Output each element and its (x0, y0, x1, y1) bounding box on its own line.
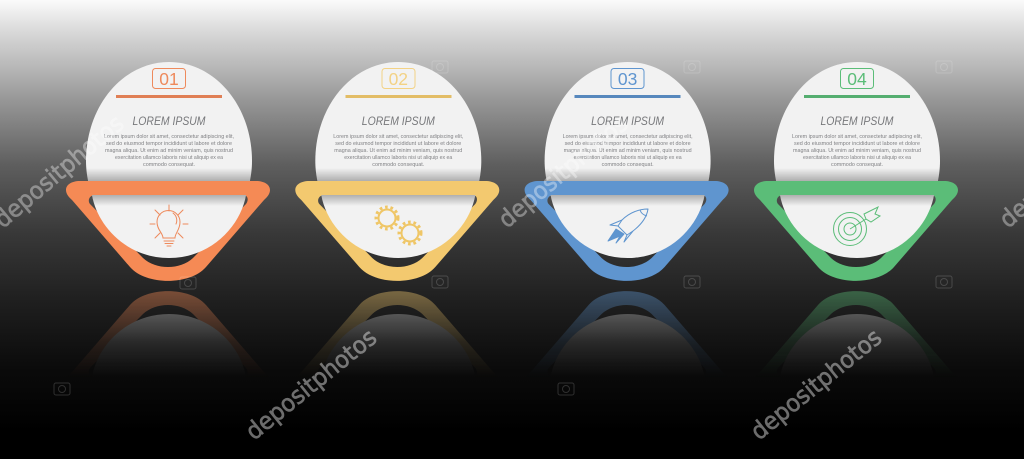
number badge 04: 04 (847, 69, 867, 89)
heading 01: LOREM IPSUM (132, 115, 206, 128)
body text 02: exercitation ullamco laboris nisi ut aliquip ex ea (344, 155, 453, 161)
body text 01 (104, 134, 234, 168)
triangular frame 03 (525, 181, 729, 281)
body text 01: sed do eiusmod tempor incididunt ut labore et dolore (106, 141, 232, 147)
accent bar 03 (574, 95, 680, 98)
icon: target with arrow (834, 207, 880, 246)
body text 02 (333, 134, 464, 168)
heading 02: LOREM IPSUM (362, 115, 435, 128)
watermarks: depositphotos (745, 323, 887, 446)
triangular frame 04 (754, 181, 958, 281)
body text 04: Lorem ipsum dolor sit amet, consectetur adipiscing elit, (792, 134, 922, 140)
watermarks: depositphotos (493, 109, 633, 234)
body text 04: commodo consequat. (831, 162, 883, 168)
number badge 02: 02 (389, 69, 408, 89)
icon: rocket (608, 209, 648, 243)
number badge 01: 01 (159, 69, 179, 89)
body text 04 (792, 134, 922, 168)
panel: card 01 (66, 62, 270, 281)
body text 03: magna aliqua. Ut enim ad minim veniam, quis nostrud (564, 148, 692, 154)
body text 02: commodo consequat. (372, 162, 425, 168)
body text 03 (563, 134, 693, 168)
body text 03: commodo consequat. (602, 162, 654, 168)
watermark camera icons (54, 61, 952, 395)
body text 04: sed do eiusmod tempor incididunt ut labore et dolore (794, 141, 920, 147)
number badge 02 (382, 68, 415, 89)
body text 01: exercitation ullamco laboris nisi ut aliquip ex ea (115, 155, 224, 161)
triangular frame 01 (66, 181, 270, 281)
body text 03: sed do eiusmod tempor incididunt ut labore et dolore (565, 141, 691, 147)
icon: gears (376, 207, 421, 244)
body text 03: Lorem ipsum dolor sit amet, consectetur adipiscing elit, (563, 134, 693, 140)
number badge 01 (152, 68, 186, 89)
watermarks (0, 109, 1024, 446)
number badge 03: 03 (618, 69, 637, 89)
heading 04: LOREM IPSUM (820, 115, 894, 128)
lower disc 01 (88, 195, 248, 258)
lower disc 02 (317, 195, 477, 258)
lower disc 03 (547, 195, 707, 258)
body text 02: magna aliqua. Ut enim ad minim veniam, quis nostrud (334, 148, 462, 154)
body text 02: Lorem ipsum dolor sit amet, consectetur adipiscing elit, (333, 134, 464, 140)
watermarks: depositphotos (240, 323, 382, 446)
number badge 03 (611, 68, 644, 89)
accent bar 01 (116, 95, 222, 98)
reflections of the four cards (79, 291, 942, 365)
icon: light bulb (150, 205, 188, 246)
body text 04: magna aliqua. Ut enim ad minim veniam, quis nostrud (793, 148, 921, 154)
triangular frame 02 (295, 181, 499, 281)
panel: card 03 (525, 62, 729, 281)
body text 03: exercitation ullamco laboris nisi ut aliquip ex ea (574, 155, 682, 161)
panel: card 04 (754, 62, 958, 281)
body text 01: magna aliqua. Ut enim ad minim veniam, quis nostrud (105, 148, 233, 154)
body text 01: commodo consequat. (143, 162, 195, 168)
lower disc 04 (776, 195, 936, 258)
accent bar 02 (346, 95, 452, 98)
heading 03: LOREM IPSUM (591, 115, 664, 128)
accent bar 04 (804, 95, 910, 98)
body text 02: sed do eiusmod tempor incididunt ut labore et dolore (335, 141, 461, 147)
number badge 04 (840, 68, 874, 89)
body text 01: Lorem ipsum dolor sit amet, consectetur adipiscing elit, (104, 134, 234, 140)
panel: card 02 (295, 62, 499, 281)
body text 04: exercitation ullamco laboris nisi ut aliquip ex ea (803, 155, 912, 161)
